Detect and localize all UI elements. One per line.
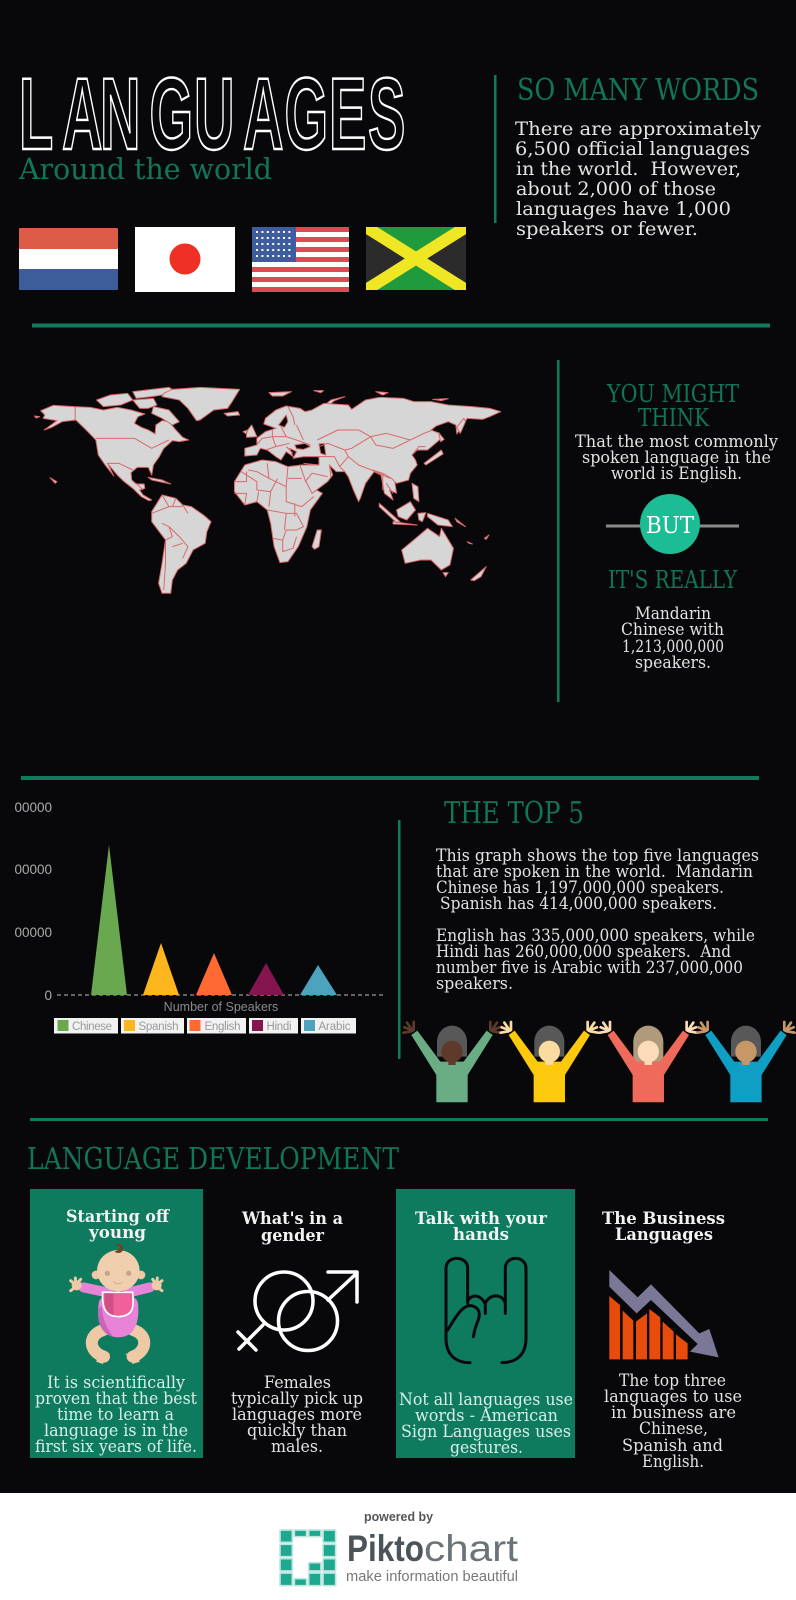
person: yellow [501, 1022, 598, 1102]
bar: Spanish [143, 943, 179, 995]
panel title: Starting off [66, 1207, 170, 1226]
panel text: languages to use [604, 1387, 742, 1407]
text block: top five languages: Spanish has 414,000,000 speakers. [440, 894, 717, 914]
but badge [606, 494, 739, 554]
text block: mandarin [621, 604, 724, 673]
y axis labels: 1000000 [0, 862, 52, 877]
legend: Chinese [72, 1021, 112, 1033]
logo wordmark: Pikto [347, 1528, 424, 1569]
map seas [279, 415, 326, 455]
divider line: you might think [557, 360, 560, 702]
text block: official languages: speakers or fewer. [516, 219, 698, 240]
text block: official languages: There are approximately [515, 119, 762, 140]
text block: top five languages: English has 335,000,000 speakers, while [436, 926, 755, 946]
panel: what's in a gender [231, 1209, 363, 1457]
panel title: gender [261, 1226, 324, 1245]
heading: you might think [606, 380, 739, 432]
panel text: The top three [619, 1371, 726, 1391]
text block: official languages: 6,500 official languages [515, 139, 750, 160]
panel title [415, 1209, 547, 1244]
panel text: first six years of life. [35, 1437, 197, 1457]
panel title: Languages [615, 1225, 713, 1244]
section rule 1 [32, 324, 770, 328]
text block: mandarin: speakers. [635, 653, 711, 673]
heading: language development: LANGUAGE DEVELOPMENT [27, 1142, 399, 1177]
flag: Jamaica [366, 227, 466, 290]
icon: people with raised arms [403, 1022, 795, 1102]
panel text: Sign Languages uses [401, 1422, 571, 1442]
powered by: powered by [364, 1509, 434, 1524]
text block: top five languages [436, 846, 759, 994]
map borders [75, 407, 433, 590]
text block: top five languages: Hindi has 260,000,000 speakers. And [436, 942, 731, 962]
text block: mandarin: Mandarin [635, 604, 711, 624]
panel text: time to learn a [57, 1405, 174, 1425]
panel text: proven that the best [35, 1389, 197, 1409]
icon: baby [71, 1245, 162, 1364]
panel title: The Business [602, 1209, 725, 1228]
text block: top five languages: speakers. [436, 974, 513, 994]
axis title: Number of Speakers [164, 1000, 278, 1014]
panel text: gestures. [450, 1438, 523, 1458]
panel text: English. [642, 1452, 704, 1472]
heading: you might think: YOU MIGHT [606, 380, 739, 408]
legend: Hindi [266, 1021, 292, 1033]
divider line: top 5 [398, 820, 400, 1059]
person: blue [697, 1022, 795, 1102]
panel title: hands [453, 1225, 509, 1244]
panel: starting off young [30, 1189, 203, 1458]
logo mark [280, 1530, 336, 1586]
panel text: Chinese, [639, 1419, 708, 1439]
text block: official languages: in the world. However, [516, 159, 741, 180]
panel text [604, 1371, 742, 1472]
heading: so many words: SO MANY WORDS [517, 73, 759, 108]
text block: english: That the most commonly [575, 432, 778, 452]
panel text: quickly than [247, 1421, 347, 1441]
heading: the top 5: THE TOP 5 [444, 796, 584, 831]
flag: USA [252, 227, 349, 292]
panel title [66, 1207, 170, 1242]
panel text: in business are [611, 1403, 736, 1423]
panel text: language is in the [44, 1421, 188, 1441]
section rule 2 [21, 776, 759, 780]
text block: english [575, 432, 778, 484]
panel text: words - American [415, 1406, 558, 1426]
footer: powered by Piktochart [0, 1493, 796, 1600]
text block: official languages: languages have 1,000 [516, 199, 731, 220]
text block: official languages: about 2,000 of those [516, 179, 716, 200]
panel text: Not all languages use [399, 1390, 573, 1410]
logo wordmark [347, 1528, 519, 1569]
icon: falling chart [609, 1270, 719, 1359]
y axis labels: 1000000 [0, 925, 52, 940]
panel: talk with your hands [396, 1189, 575, 1458]
bar: Hindi [248, 963, 284, 995]
icon: hand sign [446, 1258, 526, 1363]
legend: Arabic [318, 1021, 351, 1033]
section rule 3 [30, 1118, 768, 1121]
y axis labels: 1000000 [0, 800, 52, 815]
legend [54, 1018, 356, 1034]
heading: it's really: IT'S REALLY [608, 566, 738, 594]
flag: Netherlands [19, 228, 118, 290]
panel text: It is scientifically [47, 1373, 185, 1393]
icon: gender symbols [238, 1272, 357, 1350]
subtitle: Around the world [18, 152, 272, 186]
panel text: typically pick up [231, 1389, 363, 1409]
text block: official languages [515, 119, 762, 240]
panel text: languages more [232, 1405, 362, 1425]
title: LANGUAGES [19, 57, 405, 171]
logo wordmark: chart [424, 1528, 519, 1569]
legend: Spanish [138, 1021, 178, 1033]
legend: English [204, 1021, 240, 1033]
bar: Arabic [300, 965, 337, 995]
bar: English [196, 953, 232, 995]
text block: mandarin: 1,213,000,000 [622, 637, 724, 657]
panel text [399, 1390, 573, 1458]
panel text: males. [271, 1437, 323, 1457]
but badge: BUT [646, 513, 695, 539]
bar: Chinese [91, 845, 127, 995]
panel text [35, 1373, 197, 1457]
heading: you might think: THINK [638, 404, 710, 432]
text block: top five languages: that are spoken in the world. Mandarin [436, 862, 753, 882]
panel title: What's in a [241, 1209, 343, 1228]
text block: top five languages: This graph shows the top five languages [436, 846, 759, 866]
text block: top five languages: number five is Arabic with 237,000,000 [436, 958, 743, 978]
panel text: Spanish and [622, 1436, 723, 1456]
person: red [600, 1022, 697, 1102]
panel title [602, 1209, 725, 1244]
panel text [231, 1373, 363, 1457]
tagline: make information beautiful [346, 1568, 518, 1585]
panel title: young [88, 1223, 146, 1242]
panel title [241, 1209, 343, 1245]
text block: mandarin: Chinese with [621, 620, 724, 640]
chart: number of speakers [0, 800, 386, 1034]
text block: top five languages: Chinese has 1,197,000,000 speakers. [436, 878, 724, 898]
world map [34, 387, 501, 593]
y axis labels: 0 [44, 988, 52, 1003]
text block: english: spoken language in the [582, 448, 771, 468]
y axis labels [15, 802, 52, 1000]
panel: business languages [602, 1209, 742, 1472]
person: green [403, 1022, 501, 1102]
panel title: Talk with your [415, 1209, 547, 1228]
panel text: Females [264, 1373, 331, 1393]
text block: english: world is English. [611, 464, 742, 484]
divider line: top [494, 75, 496, 223]
flag: Japan [135, 227, 235, 292]
